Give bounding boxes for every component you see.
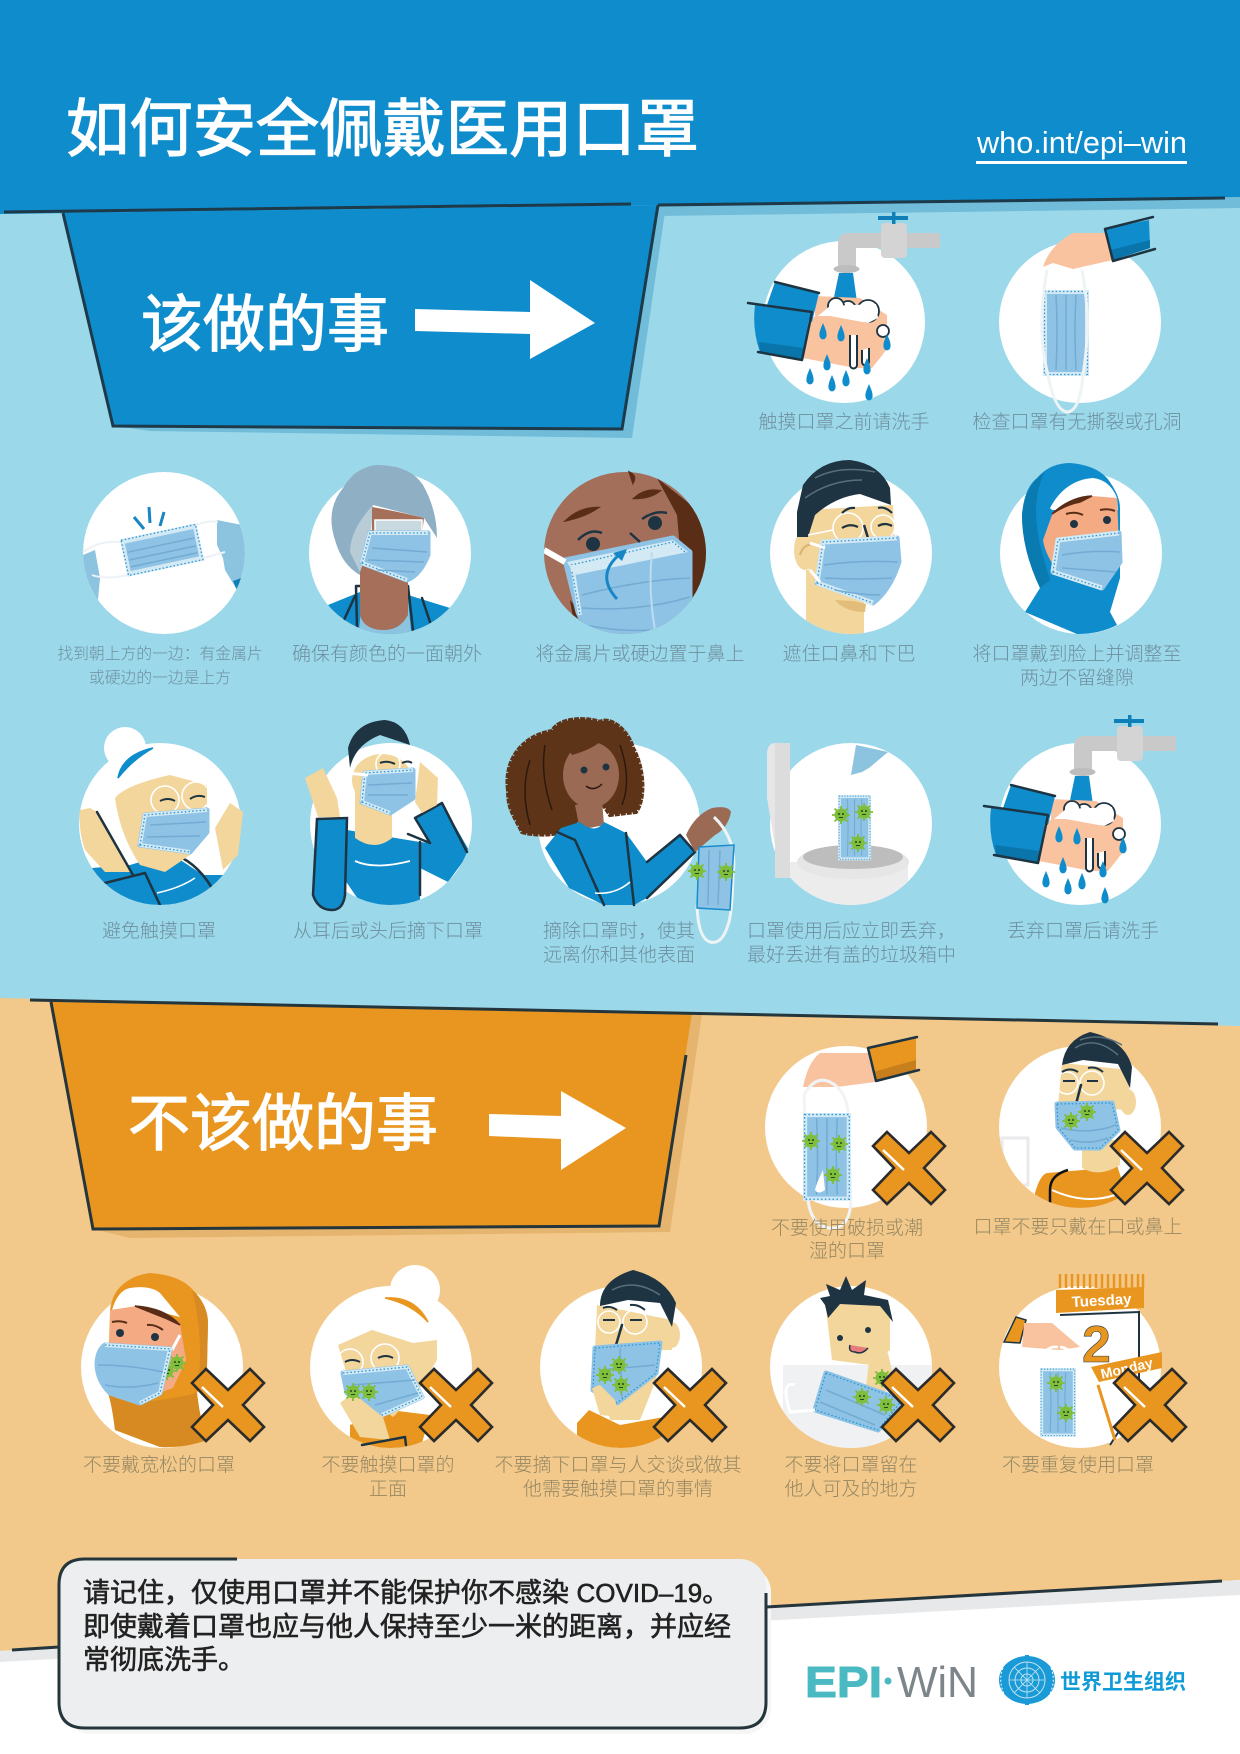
- caption: 不要将口罩留在: [784, 1454, 918, 1476]
- icon: calendar: 2: [1082, 1316, 1111, 1374]
- icon: cross: [420, 1369, 492, 1441]
- panel: do not reuse: [999, 1274, 1186, 1476]
- website link: who.int/epi–win: [976, 125, 1187, 160]
- logo: WHO: [999, 1655, 1186, 1705]
- caption: 避免触摸口罩: [102, 920, 216, 942]
- panel: do not banner: [30, 1000, 1218, 1238]
- logo: EPI-WIN: [805, 1658, 978, 1707]
- panel: do not remove to talk: [494, 1270, 742, 1500]
- caption: 不要使用破损或潮: [771, 1217, 923, 1239]
- panel: hold mask away from you: [507, 719, 735, 966]
- panel: cover mouth, nose and chin: [770, 460, 932, 665]
- panel: not only over mouth or nose: [973, 1032, 1183, 1238]
- panel: no damaged or damp masks: [765, 1037, 945, 1262]
- panel: wash hands after discarding: [984, 715, 1176, 942]
- line 1: 请记住，仅使用口罩并不能保护你不感染 COVID–19。: [83, 1578, 729, 1608]
- caption line 2: 正面: [369, 1479, 407, 1500]
- icon: cross: [873, 1132, 945, 1204]
- panel: no loose masks: [81, 1273, 264, 1476]
- footer shadow band: [0, 1580, 1240, 1662]
- caption line 2: 远离你和其他表面: [543, 944, 695, 966]
- caption: 摘除口罩时，使其: [543, 920, 695, 942]
- icon: cross: [192, 1369, 264, 1441]
- background: white footer: [0, 1580, 1240, 1754]
- background: light blue do section: [0, 190, 1240, 1030]
- heading: do not: 不该做的事: [128, 1090, 438, 1159]
- icon: curly hair: [507, 719, 642, 835]
- caption: 检查口罩有无撕裂或孔洞: [972, 411, 1182, 433]
- panel: find the upper side: [57, 472, 263, 687]
- icon: cross: [1114, 1369, 1186, 1441]
- caption line 2: 他人可及的地方: [784, 1478, 918, 1500]
- header band: [0, 0, 1240, 214]
- panel: do not touch the front: [310, 1265, 492, 1500]
- caption: 将金属片或硬边置于鼻上: [535, 643, 745, 665]
- caption line 2: 或硬边的一边是上方: [89, 669, 231, 687]
- caption: 将口罩戴到脸上并调整至: [972, 643, 1182, 665]
- icon: calendar: [1056, 1274, 1162, 1445]
- header shadow band: [658, 197, 1240, 216]
- caption: 确保有颜色的一面朝外: [292, 643, 482, 665]
- line 2: 即使戴着口罩也应与他人保持至少一米的距离，并应经: [83, 1612, 731, 1642]
- caption: 从耳后或头后摘下口罩: [293, 920, 483, 942]
- caption line 2: 最好丢进有盖的垃圾箱中: [747, 944, 956, 966]
- caption: 口罩不要只戴在口或鼻上: [973, 1216, 1183, 1238]
- caption: 找到朝上方的一边：有金属片: [57, 645, 263, 663]
- icon: calendar: Monday: [1099, 1354, 1154, 1382]
- panel: discard in a closed bin: [747, 743, 956, 966]
- panel: do not leave within reach: [770, 1276, 954, 1500]
- arrow: do not: [489, 1091, 626, 1170]
- caption line 2: 湿的口罩: [809, 1240, 885, 1262]
- logo: EPI-WIN: WiN: [897, 1658, 978, 1707]
- logo: EPI-WIN: EPI: [805, 1658, 882, 1707]
- callout: reminder: [59, 1559, 771, 1734]
- background: orange don't section: [0, 998, 1240, 1670]
- panel: coloured side outward: [292, 465, 482, 665]
- line 3: 常彻底洗手。: [83, 1645, 245, 1675]
- panel: remove straps from behind: [293, 720, 483, 942]
- caption: 不要触摸口罩的: [321, 1454, 455, 1476]
- panel: wash hands before touching mask: [748, 212, 940, 433]
- panel: fit without gaps: [972, 463, 1182, 689]
- icon: calendar: Tuesday: [1071, 1291, 1133, 1311]
- caption line 2: 他需要触摸口罩的事情: [523, 1478, 713, 1500]
- panel: avoid touching the mask: [79, 727, 243, 942]
- footer boundary line: [12, 1581, 1222, 1650]
- caption: 丢弃口罩后请洗手: [1007, 920, 1159, 942]
- caption line 2: 两边不留缝隙: [1020, 667, 1134, 689]
- caption: 不要戴宽松的口罩: [83, 1454, 235, 1476]
- arrow: do: [415, 280, 595, 359]
- title: 如何安全佩戴医用口罩: [66, 95, 699, 165]
- panel: do banner: [4, 198, 1225, 438]
- heading: do: 该做的事: [141, 291, 389, 360]
- caption: 遮住口鼻和下巴: [782, 643, 916, 665]
- panel: metal strip over the nose: [535, 472, 745, 665]
- icon: hair bun: [104, 727, 146, 769]
- icon: cross: [1111, 1132, 1183, 1204]
- caption: 口罩使用后应立即丢弃，: [747, 920, 956, 942]
- caption: 不要摘下口罩与人交谈或做其: [494, 1454, 742, 1476]
- wordmark: 世界卫生组织: [1060, 1671, 1186, 1694]
- panel: inspect the mask: [972, 217, 1182, 433]
- icon: cross: [882, 1369, 954, 1441]
- icon: cross: [654, 1369, 726, 1441]
- caption: 不要重复使用口罩: [1002, 1454, 1154, 1476]
- caption: 触摸口罩之前请洗手: [758, 411, 930, 433]
